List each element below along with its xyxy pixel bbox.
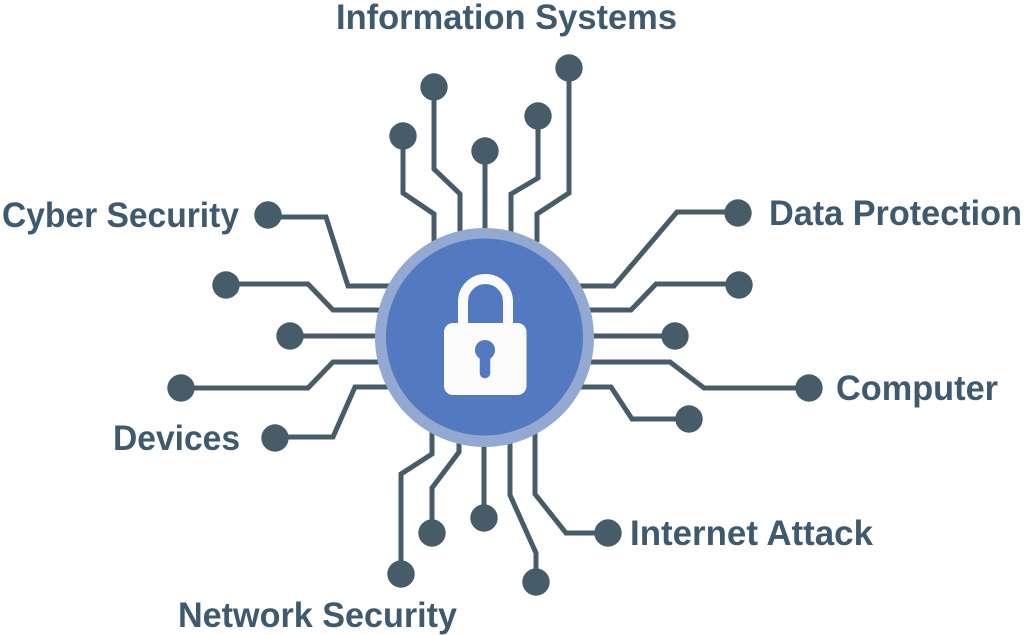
central circle with lock (375, 228, 594, 447)
icon: padlock (444, 279, 526, 395)
label: Computer: Computer (836, 369, 998, 408)
label: Internet Attack: Internet Attack (630, 514, 874, 553)
label: Cyber Security: Cyber Security (2, 196, 240, 235)
label: Devices: Devices (113, 419, 240, 458)
circuit wires: left (167, 201, 392, 452)
circuit wires: right (575, 199, 823, 433)
label: Data Protection: Data Protection (769, 194, 1022, 233)
label: Network Security: Network Security (178, 596, 458, 635)
circuit wires: bottom (387, 430, 622, 596)
circuit wires: top (389, 54, 583, 242)
